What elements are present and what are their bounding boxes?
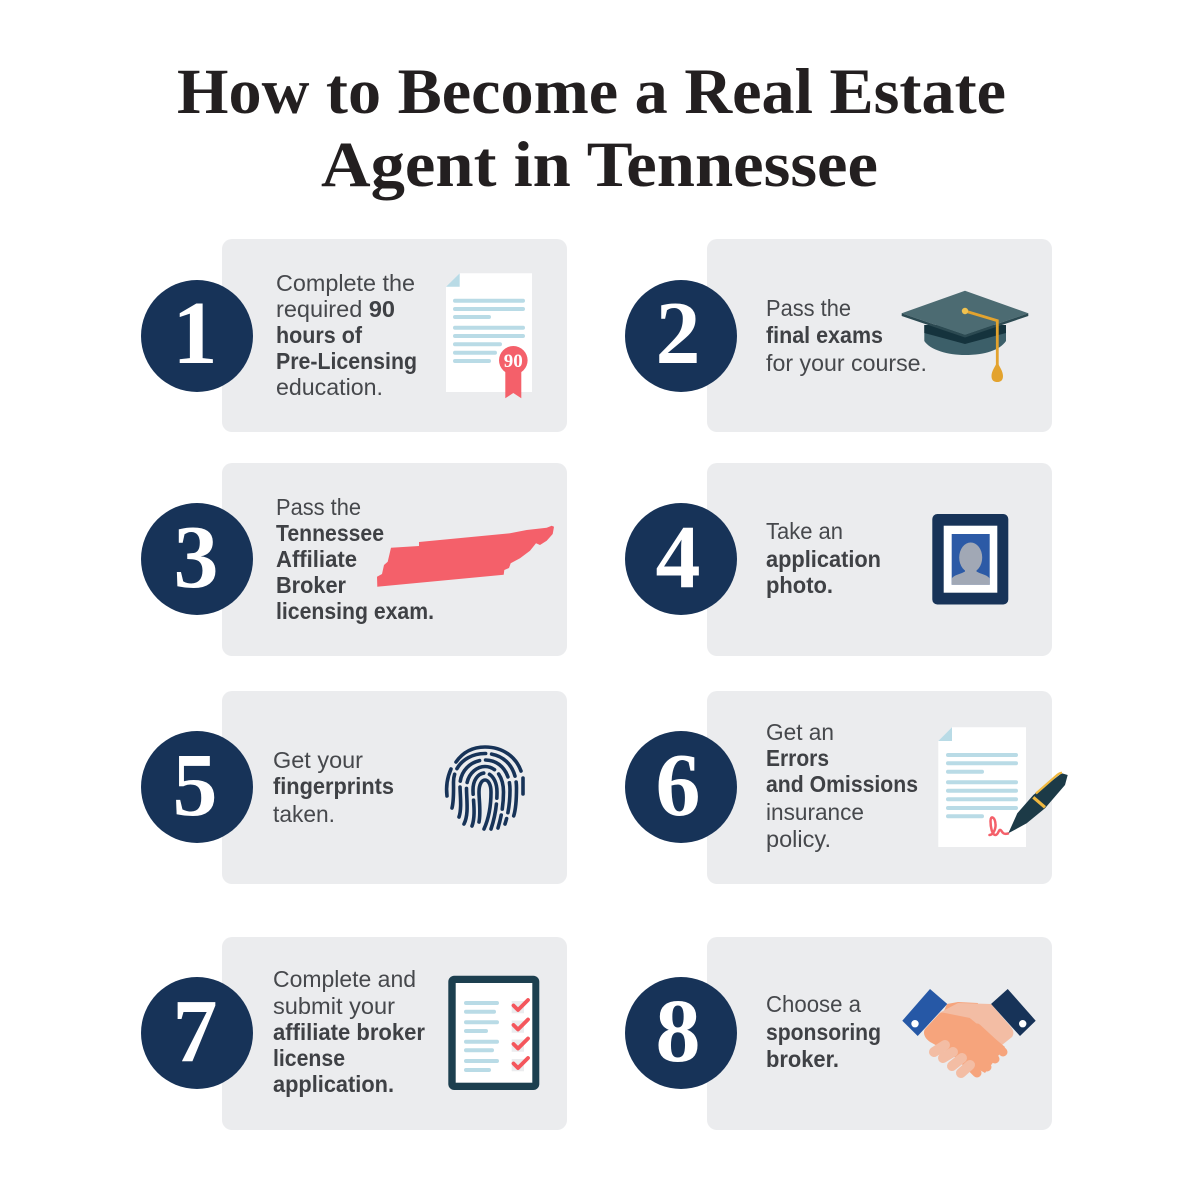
title: Agent in Tennessee [321, 129, 878, 201]
text: step 4: photo. [766, 572, 833, 598]
text: step 6: Get an [766, 719, 834, 745]
number badge 6 [625, 731, 737, 843]
text: step 1: education. [276, 374, 383, 400]
text: step 8 [766, 991, 881, 1072]
text: step 7 [273, 966, 425, 1097]
text: step 3: Broker [276, 572, 346, 598]
icon: signed document and pen [938, 727, 1068, 847]
number badge 5 [141, 731, 253, 843]
number badge 1 [141, 280, 253, 392]
text: step 8: sponsoring [766, 1019, 881, 1045]
text: step 8: broker. [766, 1046, 839, 1072]
text: step 1: Complete the [276, 270, 415, 296]
number badge 8: 8 [656, 982, 700, 1081]
text: step 2: Pass the [766, 295, 851, 321]
text: step 7: application. [273, 1071, 394, 1097]
text: step 3: Pass the [276, 494, 361, 520]
text: step 5 [273, 747, 394, 827]
icon: handshake [902, 989, 1036, 1073]
text: step 2 [766, 295, 927, 376]
text: step 6: Errors [766, 745, 829, 771]
text: step 5: Get your [273, 747, 363, 773]
icon: graduation cap [902, 291, 1028, 382]
number badge 1: 1 [172, 284, 218, 383]
text: step 6: and Omissions [766, 771, 918, 797]
panel: step 2 [625, 239, 1052, 432]
number badge 7 [141, 977, 253, 1089]
panel: step 1 [141, 239, 567, 432]
panel: step 6 [625, 691, 1068, 884]
text: step 5: taken. [273, 801, 335, 827]
icon: fingerprint [447, 747, 523, 829]
panel: step 5 [141, 691, 567, 884]
icon: certificate with 90 ribbon [446, 273, 532, 398]
text: step 4: Take an [766, 518, 843, 544]
text: step 3 [276, 494, 434, 624]
text: step 2: final exams [766, 322, 883, 348]
number badge 2: 2 [656, 284, 700, 383]
text: step 7: affiliate broker [273, 1019, 425, 1045]
number badge 4 [625, 503, 737, 615]
text: step 7: Complete and [273, 966, 416, 992]
title: How to Become a Real Estate [177, 56, 1006, 128]
text: step 2: for your course. [766, 350, 927, 376]
text: step 1 [276, 270, 417, 400]
text: step 7: license [273, 1045, 345, 1071]
text: step 8: Choose a [766, 991, 861, 1017]
text: step 4: application [766, 546, 881, 572]
icon: Tennessee map [377, 526, 554, 587]
panel: step 7 [141, 937, 567, 1130]
text: step 5: fingerprints [273, 773, 394, 799]
number badge 4: 4 [656, 508, 700, 607]
text: step 6: policy. [766, 826, 831, 852]
title [177, 56, 1006, 201]
number badge 8 [625, 977, 737, 1089]
number badge 7: 7 [172, 982, 218, 1081]
text: step 1: hours of [276, 322, 362, 348]
number badge 5: 5 [172, 736, 218, 835]
panel: step 3 [141, 463, 567, 656]
number badge 2 [625, 280, 737, 392]
icon: application photo [932, 514, 1008, 604]
panel: step 4 [625, 463, 1052, 656]
icon: certificate with 90 ribbon: 90 [504, 351, 523, 372]
number badge 6: 6 [656, 736, 700, 835]
text: step 3: Tennessee [276, 520, 384, 546]
panel: step 8 [625, 937, 1052, 1130]
text: step 7: submit your [273, 993, 395, 1019]
text: step 3: licensing exam. [276, 598, 434, 624]
text: step 6 [766, 719, 918, 852]
number badge 3: 3 [174, 508, 218, 607]
text: step 1: Pre-Licensing [276, 348, 417, 374]
text: step 3: Affiliate [276, 546, 357, 572]
text: step 4 [766, 518, 881, 598]
text: step 1: required 90 [276, 296, 395, 322]
icon: checklist [448, 976, 539, 1090]
text: step 6: insurance [766, 799, 864, 825]
number badge 3 [141, 503, 253, 615]
